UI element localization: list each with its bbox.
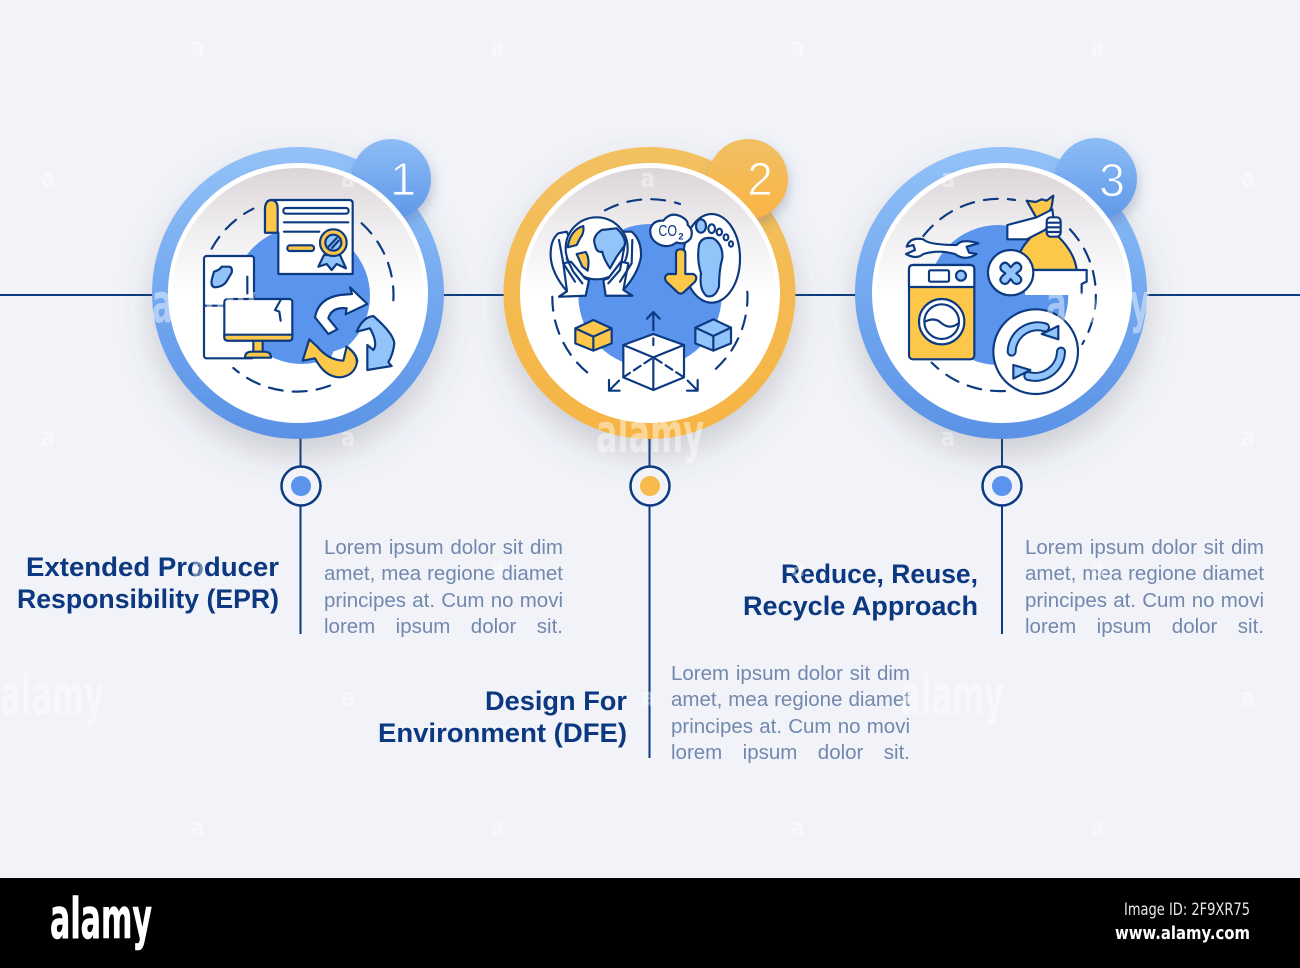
watermarks: alamy bbox=[900, 664, 1004, 727]
icon: wrench, washing machine, trash bag, cancel, recycle bbox=[906, 196, 1096, 394]
watermarks: a bbox=[491, 33, 505, 63]
small blue cube bbox=[695, 319, 731, 351]
watermarks: a bbox=[641, 164, 655, 194]
watermarks: a bbox=[1091, 813, 1105, 843]
cancel mark bbox=[988, 250, 1033, 295]
heading: Design For Environment: Design For bbox=[485, 686, 627, 716]
text block 2: amet, mea regione diamet bbox=[671, 688, 910, 711]
watermarks: a bbox=[791, 33, 805, 63]
footer image id: Image ID: 2F9XR75 bbox=[1124, 900, 1250, 920]
badge 1 bbox=[351, 139, 431, 219]
badge 3 bbox=[1055, 138, 1137, 220]
text block 3: amet, mea regione diamet bbox=[1025, 562, 1264, 585]
text block 3: principes at. Cum no movi bbox=[1025, 589, 1264, 612]
text block 2: lorem ipsum dolor sit. bbox=[671, 741, 910, 764]
bin ledge bbox=[1025, 270, 1087, 295]
text block 2: Lorem ipsum dolor sit dim bbox=[671, 662, 910, 685]
heading: Extended Producer Responsibility: Extended Producer bbox=[26, 552, 280, 582]
text block 1 bbox=[324, 536, 563, 638]
watermarks: a bbox=[941, 423, 955, 453]
certificate bbox=[265, 200, 353, 274]
text block 1: Lorem ipsum dolor sit dim bbox=[324, 536, 563, 559]
watermarks: a bbox=[791, 813, 805, 843]
heading: Reduce, Reuse, Recycle: Recycle Approach bbox=[743, 591, 978, 621]
heading: Design For Environment: Environment (DFE) bbox=[378, 718, 627, 748]
watermarks: alamy bbox=[596, 402, 704, 465]
watermarks: a bbox=[41, 423, 55, 453]
heading: Extended Producer Responsibility: Responsibility (EPR) bbox=[17, 584, 279, 614]
text block 3: lorem ipsum dolor sit. bbox=[1025, 615, 1264, 638]
watermarks: a bbox=[641, 683, 655, 713]
watermarks: a bbox=[491, 553, 505, 583]
watermarks: a bbox=[1241, 423, 1255, 453]
step 1 circle bbox=[152, 139, 444, 439]
text block 2: principes at. Cum no movi bbox=[671, 715, 910, 738]
timeline marker 1 bbox=[282, 466, 320, 506]
text block 1: amet, mea regione diamet bbox=[324, 562, 563, 585]
watermarks: a bbox=[341, 683, 355, 713]
text block 3: Lorem ipsum dolor sit dim bbox=[1025, 536, 1264, 559]
watermarks: a bbox=[341, 164, 355, 194]
watermarks: a bbox=[941, 164, 955, 194]
icon: globe in hands, CO2 footprint, packaging cubes bbox=[551, 199, 747, 391]
watermarks: a bbox=[491, 813, 505, 843]
step 3 circle bbox=[855, 138, 1147, 439]
hands holding globe bbox=[551, 217, 641, 297]
text block 1: principes at. Cum no movi bbox=[324, 589, 563, 612]
CO2 cloud: CO bbox=[658, 223, 677, 240]
wrench bbox=[906, 239, 978, 258]
text block 1: lorem ipsum dolor sit. bbox=[324, 615, 563, 638]
arrow: CO2 reduction bbox=[665, 249, 696, 294]
text block 3 bbox=[1025, 536, 1264, 638]
watermarks: a bbox=[791, 553, 805, 583]
timeline marker 3 bbox=[982, 466, 1022, 506]
trash bag bbox=[1007, 196, 1077, 270]
timeline marker 2 bbox=[630, 466, 670, 506]
heading: Reduce, Reuse, Recycle: Reduce, Reuse, bbox=[781, 559, 978, 589]
washing machine bbox=[909, 265, 974, 359]
watermarks: alamy bbox=[0, 664, 104, 727]
timeline connectors bbox=[0, 295, 1300, 758]
CO2 cloud bbox=[650, 215, 692, 246]
icon: EPR certificate, fridge, monitor, recycling bbox=[204, 200, 394, 392]
CO2 cloud: 2 bbox=[678, 231, 684, 241]
monitor bbox=[224, 299, 292, 358]
fridge bbox=[204, 256, 254, 358]
text block 2 bbox=[671, 662, 910, 764]
large white cube with arrows bbox=[609, 312, 698, 391]
watermarks: alamy bbox=[1046, 272, 1150, 335]
watermarks: a bbox=[191, 813, 205, 843]
watermarks: a bbox=[1241, 683, 1255, 713]
watermarks: a bbox=[341, 423, 355, 453]
watermarks: a bbox=[191, 33, 205, 63]
small yellow cube bbox=[575, 320, 612, 351]
footer bar bbox=[0, 878, 1300, 968]
recycle circle bbox=[993, 309, 1078, 394]
heading: Design For Environment bbox=[378, 686, 627, 748]
watermarks: a bbox=[1091, 553, 1105, 583]
heading: Extended Producer Responsibility bbox=[17, 552, 280, 614]
recycling arrows bbox=[303, 287, 394, 377]
footer logo: alamy bbox=[50, 887, 152, 952]
badge 1: 1 bbox=[390, 153, 416, 205]
step 2 circle bbox=[504, 139, 796, 439]
watermarks: a bbox=[41, 164, 55, 194]
badge 2: 2 bbox=[747, 153, 773, 205]
footprint bbox=[683, 214, 740, 303]
heading: Reduce, Reuse, Recycle bbox=[743, 559, 978, 621]
watermarks: a bbox=[1091, 33, 1105, 63]
watermarks: alamy bbox=[152, 272, 256, 335]
watermarks: a bbox=[191, 553, 205, 583]
footer url: www.alamy.com bbox=[1115, 923, 1250, 944]
badge 2 bbox=[708, 139, 788, 219]
watermarks: a bbox=[1241, 164, 1255, 194]
badge 3: 3 bbox=[1099, 154, 1125, 206]
